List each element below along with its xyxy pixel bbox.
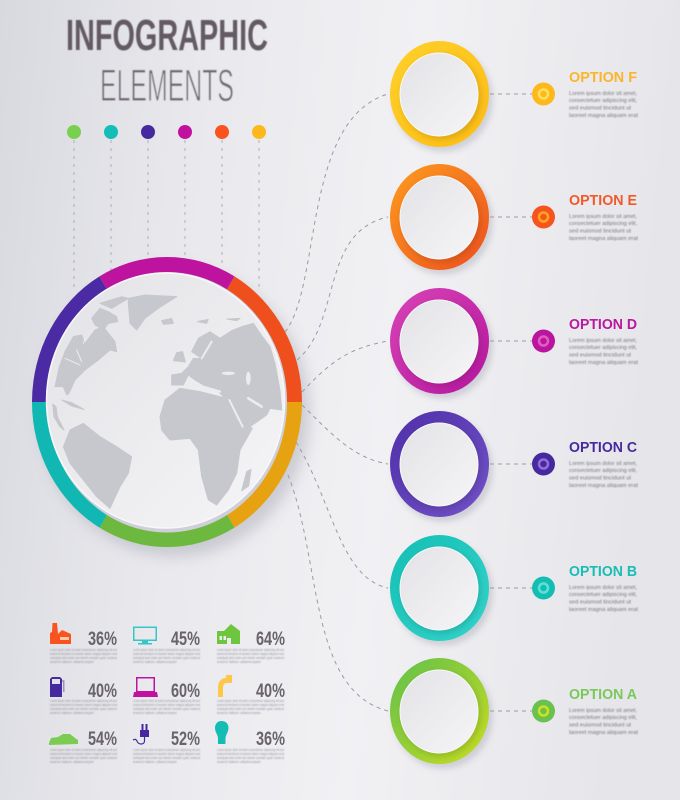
stat: plug 52% (133, 724, 200, 764)
option F badge (532, 82, 555, 106)
stat: monitor 45%: Lorem ipsum dolor sit amet consectetuer adipiscing elit sed (133, 648, 200, 652)
stat: light bulb 36%: Lorem ipsum dolor sit amet consectetuer adipiscing elit sed (217, 748, 284, 752)
stat: light bulb 36% (215, 721, 285, 764)
statistics grid (49, 623, 285, 764)
stat: light bulb 36%: exerci tation ullamcorper (217, 760, 262, 764)
option C text: sed euismod tincidunt ut (569, 476, 631, 482)
option C text: Lorem ipsum dolor sit amet, (569, 461, 637, 467)
option F link (490, 93, 532, 95)
stat: factory 36%: 36% (88, 629, 117, 650)
option B (390, 535, 638, 646)
option A text (569, 708, 638, 736)
option B label: OPTION B (569, 564, 637, 580)
option D text: sed euismod tincidunt ut (569, 352, 631, 358)
title (66, 11, 268, 111)
ring segment: teal (32, 402, 107, 528)
stat: car 54%: volutpat wisi enim ad minim veniam quis nostrud (50, 756, 117, 760)
stat: laptop 60%: volutpat wisi enim ad minim veniam quis nostrud (133, 707, 200, 711)
option A text: Lorem ipsum dolor sit amet, (569, 708, 637, 714)
option C link (490, 463, 532, 465)
option D ring (390, 288, 489, 394)
stat: plug 52%: Lorem ipsum dolor sit amet consectetuer adipiscing elit sed (133, 748, 200, 752)
option B text: sed euismod tincidunt ut (569, 600, 631, 606)
option D text (569, 338, 638, 366)
stat: house 64%: exerci tation ullamcorper (217, 660, 262, 664)
globe (32, 257, 310, 557)
option A (390, 658, 638, 769)
stat: car 54%: euismod tincidunt ut laoreet dolore magna aliquam erat (50, 752, 117, 756)
option A badge (532, 700, 555, 722)
option D link (490, 340, 532, 342)
option E label: OPTION E (569, 193, 637, 209)
option B text: Lorem ipsum dolor sit amet, (569, 585, 637, 591)
ring segment: purple (32, 276, 107, 402)
stat: fuel pump 40%: euismod tincidunt ut laoreet dolore magna aliquam erat (50, 703, 117, 707)
stat: light bulb 36%: volutpat wisi enim ad minim veniam quis nostrud (217, 756, 284, 760)
stat: tap 40%: volutpat wisi enim ad minim veniam quis nostrud (217, 707, 284, 711)
option E link (490, 216, 532, 218)
option A label: OPTION A (569, 687, 638, 703)
stat: monitor 45%: euismod tincidunt ut laoreet dolore magna aliquam erat (133, 652, 200, 656)
stat: fuel pump 40%: 40% (88, 681, 117, 702)
option F ring (390, 41, 489, 147)
option A ring (390, 658, 489, 764)
option F text (569, 91, 638, 119)
stat: tap 40% (217, 675, 285, 715)
option D label: OPTION D (569, 317, 637, 333)
option B ring (390, 535, 489, 641)
option D disc (400, 300, 478, 383)
colour dot markers with dashed leaders (67, 125, 266, 292)
option F disc (400, 53, 478, 136)
stat: tap 40%: Lorem ipsum dolor sit amet consectetuer adipiscing elit sed (217, 699, 284, 703)
title: INFOGRAPHIC (66, 11, 268, 60)
option D badge (532, 330, 555, 352)
stat: car 54%: exerci tation ullamcorper (50, 760, 95, 764)
option E text: consectetuer adipiscing elit, (569, 221, 637, 227)
stat: light bulb 36%: euismod tincidunt ut laoreet dolore magna aliquam erat (217, 752, 284, 756)
option A text: consectetuer adipiscing elit, (569, 715, 637, 721)
option C label: OPTION C (569, 440, 638, 456)
option C text: consectetuer adipiscing elit, (569, 468, 637, 474)
stat: monitor 45%: volutpat wisi enim ad minim veniam quis nostrud (133, 656, 200, 660)
stat: plug 52%: exerci tation ullamcorper (133, 760, 178, 764)
option E ring (390, 164, 489, 270)
option E text: Lorem ipsum dolor sit amet, (569, 214, 637, 220)
ring segment: red (227, 276, 302, 402)
option D text: consectetuer adipiscing elit, (569, 345, 637, 351)
stat: laptop 60%: 60% (171, 681, 200, 702)
stat: plug 52%: 52% (171, 729, 200, 750)
stat: factory 36% (50, 623, 117, 664)
stat: light bulb 36%: 36% (256, 729, 285, 750)
option F text: laoreet magna aliquam erat (569, 113, 638, 119)
option D text: laoreet magna aliquam erat (569, 360, 638, 366)
inland seas (65, 338, 262, 427)
option A link (490, 710, 532, 712)
stat: car 54%: Lorem ipsum dolor sit amet consectetuer adipiscing elit sed (50, 748, 117, 752)
stat: laptop 60%: exerci tation ullamcorper (133, 711, 178, 715)
option E disc (400, 176, 478, 259)
ring segment: magenta (100, 257, 234, 289)
stat: car 54%: 54% (88, 729, 117, 750)
stat: fuel pump 40%: volutpat wisi enim ad minim veniam quis nostrud (50, 707, 117, 711)
option E text: laoreet magna aliquam erat (569, 236, 638, 242)
option C (390, 411, 638, 522)
stat: monitor 45%: exerci tation ullamcorper (133, 660, 178, 664)
stat: fuel pump 40%: exerci tation ullamcorper (50, 711, 95, 715)
option C text: laoreet magna aliquam erat (569, 483, 638, 489)
option F text: sed euismod tincidunt ut (569, 106, 631, 112)
option F (390, 41, 638, 152)
stat: laptop 60%: Lorem ipsum dolor sit amet consectetuer adipiscing elit sed (133, 699, 200, 703)
option E text (569, 214, 638, 242)
stat: monitor 45% (133, 626, 200, 664)
option D (390, 288, 638, 399)
stat: laptop 60% (133, 677, 200, 715)
option F label: OPTION F (569, 70, 637, 86)
ring segment: amber (227, 402, 302, 528)
stat: car 54% (49, 729, 117, 764)
option E (390, 164, 638, 275)
option A text: laoreet magna aliquam erat (569, 730, 638, 736)
stat: house 64%: volutpat wisi enim ad minim veniam quis nostrud (217, 656, 284, 660)
stat: fuel pump 40% (50, 677, 117, 715)
option B link (490, 587, 532, 589)
option B text: consectetuer adipiscing elit, (569, 592, 637, 598)
ring segment: green (100, 515, 234, 547)
stat: factory 36%: Lorem ipsum dolor sit amet consectetuer adipiscing elit sed (50, 648, 117, 652)
stat: house 64%: euismod tincidunt ut laoreet dolore magna aliquam erat (217, 652, 284, 656)
stat: house 64%: 64% (256, 629, 285, 650)
option E text: sed euismod tincidunt ut (569, 228, 631, 234)
option C disc (400, 423, 478, 506)
option B text (569, 585, 638, 613)
option B disc (400, 547, 478, 630)
stat: tap 40%: euismod tincidunt ut laoreet dolore magna aliquam erat (217, 703, 284, 707)
stat: factory 36%: euismod tincidunt ut laoreet dolore magna aliquam erat (50, 652, 117, 656)
option F text: consectetuer adipiscing elit, (569, 98, 637, 104)
stat: house 64%: Lorem ipsum dolor sit amet consectetuer adipiscing elit sed (217, 648, 284, 652)
option C ring (390, 411, 489, 517)
dashed connectors from globe to options (285, 94, 388, 711)
stat: plug 52%: euismod tincidunt ut laoreet dolore magna aliquam erat (133, 752, 200, 756)
stat: monitor 45%: 45% (171, 629, 200, 650)
stat: tap 40%: exerci tation ullamcorper (217, 711, 262, 715)
stat: plug 52%: volutpat wisi enim ad minim veniam quis nostrud (133, 756, 200, 760)
stat: fuel pump 40%: Lorem ipsum dolor sit amet consectetuer adipiscing elit sed (50, 699, 117, 703)
stat: factory 36%: volutpat wisi enim ad minim veniam quis nostrud (50, 656, 117, 660)
stat: laptop 60%: euismod tincidunt ut laoreet dolore magna aliquam erat (133, 703, 200, 707)
world map (53, 295, 282, 508)
option C text (569, 461, 638, 489)
stat: tap 40%: 40% (256, 681, 285, 702)
option B badge (532, 576, 555, 600)
stat: house 64% (217, 624, 285, 664)
option B text: laoreet magna aliquam erat (569, 607, 638, 613)
option A disc (400, 670, 478, 753)
stat: factory 36%: exerci tation ullamcorper (50, 660, 95, 664)
globe disc (47, 272, 287, 532)
option C badge (532, 452, 555, 476)
title: ELEMENTS (100, 60, 234, 111)
option A text: sed euismod tincidunt ut (569, 722, 631, 728)
option F text: Lorem ipsum dolor sit amet, (569, 91, 637, 97)
option E badge (532, 206, 555, 228)
option D text: Lorem ipsum dolor sit amet, (569, 338, 637, 344)
